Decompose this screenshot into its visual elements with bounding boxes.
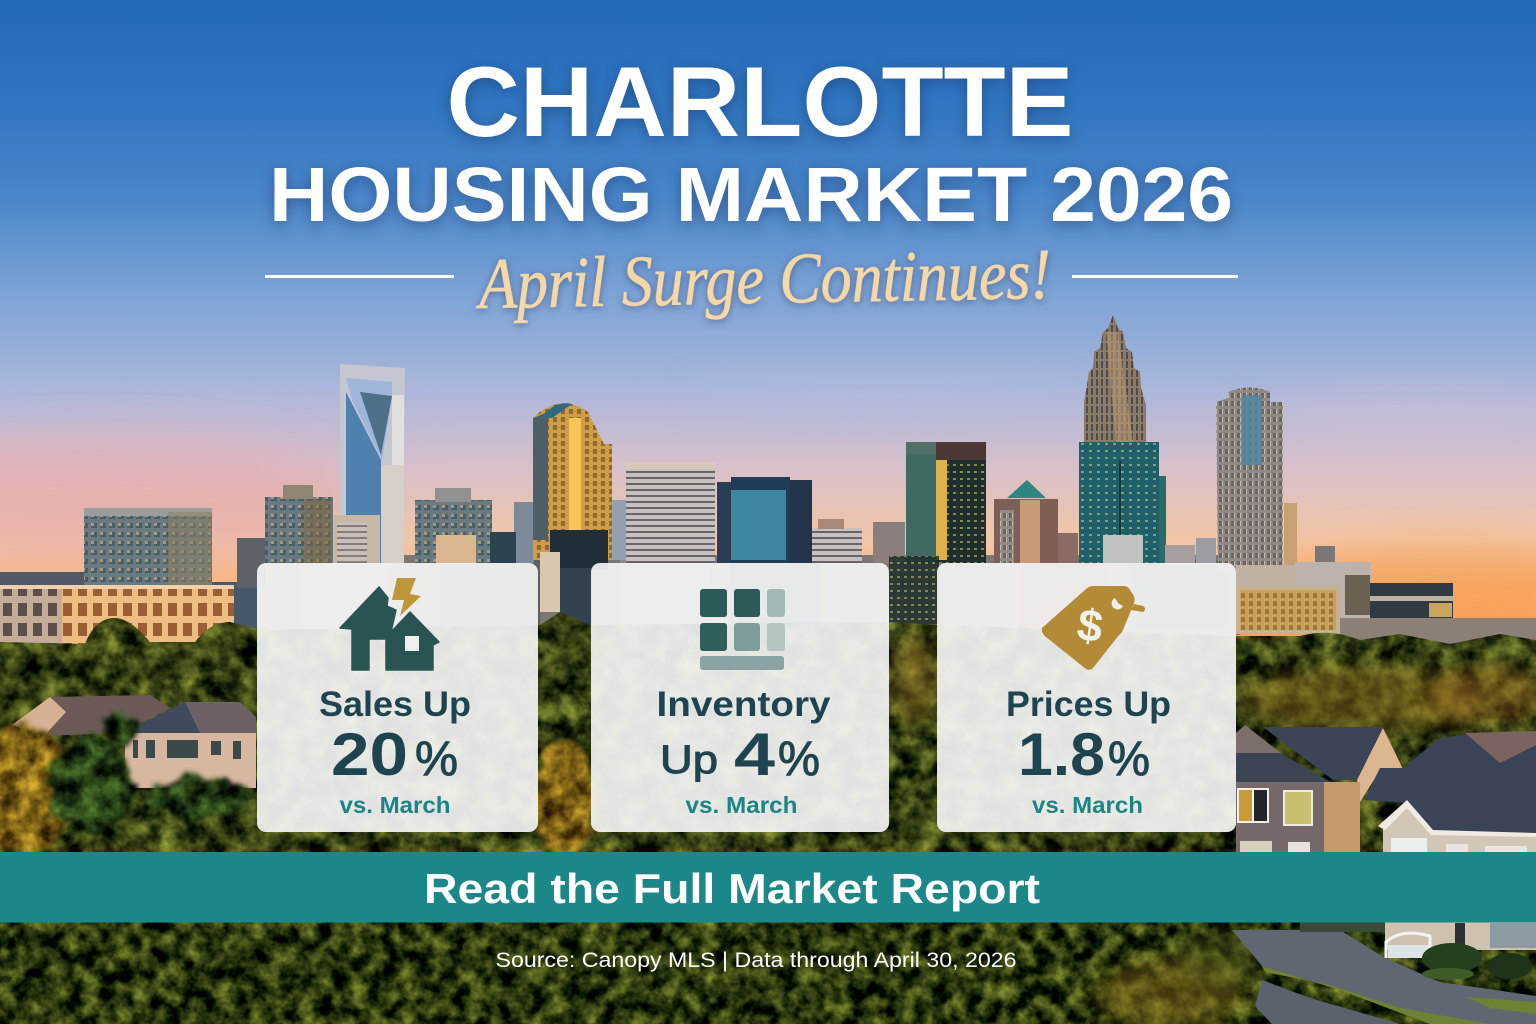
grass strip — [1262, 966, 1490, 1024]
title — [269, 46, 1233, 238]
script subtitle: April Surge Continues! — [475, 234, 1052, 324]
value: % — [778, 733, 820, 786]
window lit — [1237, 788, 1269, 823]
front house wall — [1383, 803, 1536, 852]
value — [1018, 721, 1150, 788]
value: % — [1108, 733, 1150, 786]
pavement — [1232, 930, 1536, 1024]
icon: price tag: $ — [1074, 599, 1106, 652]
title line: Housing Market 2026: HOUSING MARKET 2026 — [269, 152, 1233, 238]
lower house wall — [1385, 922, 1536, 950]
lower right neighbourhood — [0, 922, 1536, 1024]
lower windows — [1288, 842, 1310, 852]
left rule — [265, 275, 454, 278]
icon: price tag — [1042, 586, 1145, 670]
upper roof — [1263, 727, 1383, 780]
houses on the right — [1236, 725, 1536, 852]
sunlit low-rise building left — [0, 585, 234, 647]
title line: Charlotte: CHARLOTTE — [446, 46, 1074, 157]
distant left buildings — [0, 538, 265, 632]
foreground trees left — [0, 712, 252, 860]
label: Prices Up — [1006, 685, 1171, 724]
subtitle with rules — [265, 234, 1238, 324]
gable — [1236, 725, 1282, 754]
banner bar — [0, 852, 1536, 922]
comparison: vs. March — [1032, 792, 1143, 818]
brown roof — [1465, 731, 1536, 763]
card background — [937, 563, 1236, 832]
houses on the left — [12, 695, 256, 788]
sunlit gable — [1357, 728, 1403, 802]
card background — [591, 563, 889, 832]
call to action banner — [0, 852, 1536, 922]
value: Up — [660, 738, 718, 782]
right rule — [1072, 275, 1238, 278]
source note: Source: Canopy MLS | Data through April 30, 2026 — [496, 949, 1016, 972]
lower roof — [1236, 753, 1331, 782]
striped central blocks — [626, 462, 905, 563]
wall left house — [1236, 782, 1326, 852]
midrise towers left — [265, 485, 492, 563]
second road — [1255, 980, 1400, 1024]
comparison: vs. March — [340, 792, 450, 818]
window pale — [1283, 790, 1313, 826]
value — [660, 721, 820, 788]
low-rise hidden behind cards — [540, 552, 939, 628]
value: % — [415, 733, 458, 786]
front windows — [1391, 838, 1427, 852]
gold domed tower — [490, 403, 626, 570]
tree canopy — [0, 612, 1536, 1024]
dark glass tower — [906, 442, 986, 563]
sky background — [0, 0, 1536, 660]
panel: inventory — [591, 563, 889, 832]
panel: prices — [937, 563, 1236, 832]
lower foliage — [0, 922, 1536, 1024]
entry steps — [1386, 933, 1430, 958]
teal roof tower — [994, 480, 1078, 563]
icon: house with lightning bolt — [340, 578, 439, 670]
value: 4 — [734, 721, 776, 788]
label: Inventory — [656, 685, 831, 724]
value: 1.8 — [1018, 721, 1105, 788]
icon: inventory blocks — [700, 589, 785, 670]
gold foliage patch — [1095, 959, 1245, 1024]
banner text: Read the Full Market Report — [424, 865, 1040, 912]
left office block — [84, 508, 212, 592]
value — [331, 721, 458, 788]
card background — [257, 563, 538, 832]
teal glass tower — [1079, 442, 1166, 563]
shrubs — [1422, 943, 1482, 973]
value: 20 — [331, 721, 408, 788]
sunlit wall — [1324, 782, 1360, 852]
crowned skyscraper — [1084, 315, 1146, 442]
city skyline — [0, 315, 1536, 647]
tower with notched crown — [340, 364, 405, 563]
label: Sales Up — [319, 685, 471, 724]
comparison: vs. March — [686, 792, 798, 818]
round-top grey tower — [1165, 388, 1297, 571]
big roof right — [1364, 733, 1536, 835]
panel: sales — [257, 563, 538, 832]
backdrop buildings behind the cards — [255, 555, 1240, 635]
right low-rise buildings — [1236, 546, 1536, 644]
